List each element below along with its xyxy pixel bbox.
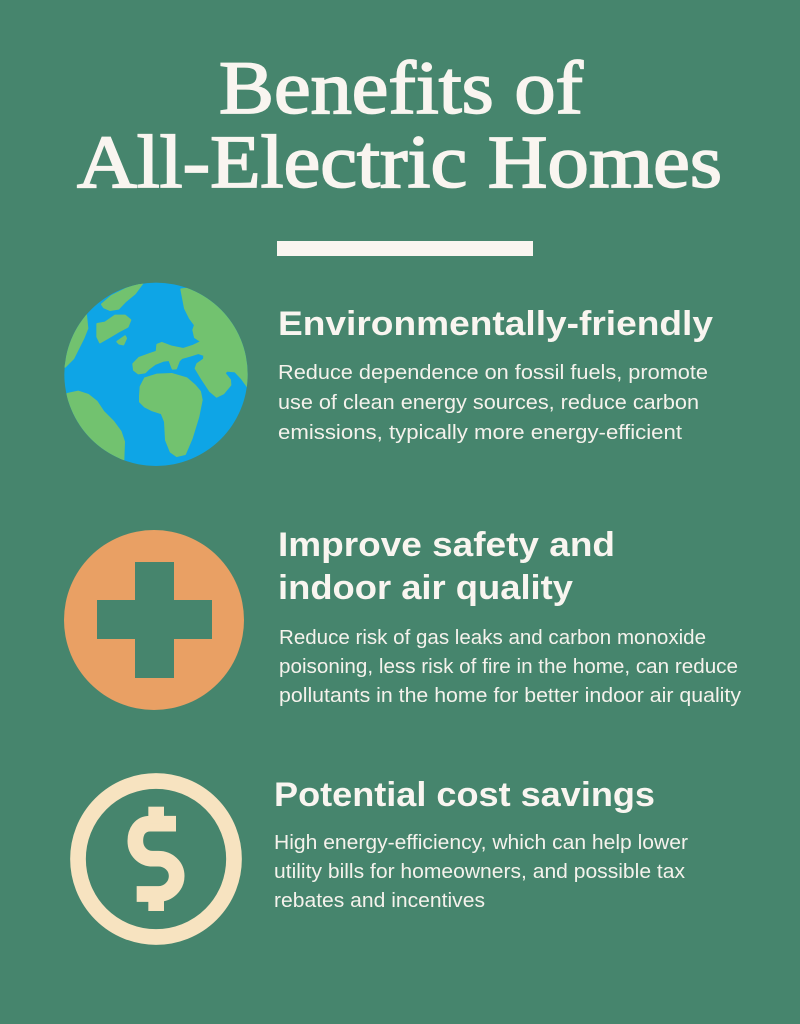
icon: dollar coin xyxy=(78,781,234,937)
text block: utility bills for homeowners, and possible tax xyxy=(274,861,685,883)
title: All-Electric Homes xyxy=(77,121,722,204)
title: Benefits of xyxy=(219,47,583,130)
heading: indoor air quality xyxy=(278,569,573,607)
title xyxy=(77,47,722,204)
text block: pollutants in the home for better indoor air quality xyxy=(279,685,741,707)
panel: cost savings xyxy=(78,776,688,937)
text block: Reduce risk of gas leaks and carbon monoxide xyxy=(279,627,706,649)
heading: Improve safety and xyxy=(278,526,615,564)
title divider bar xyxy=(277,241,533,256)
infographic canvas xyxy=(64,59,741,945)
icon: medical cross xyxy=(64,530,244,710)
text block xyxy=(274,832,688,912)
text block: emissions, typically more energy-efficient xyxy=(278,422,682,444)
text block: poisoning, less risk of fire in the home, can reduce xyxy=(279,656,738,678)
panel: safety and air quality xyxy=(64,526,741,710)
text block: Reduce dependence on fossil fuels, promote xyxy=(278,362,708,384)
heading: Potential cost savings xyxy=(274,776,655,814)
text block xyxy=(279,627,741,707)
text block: rebates and incentives xyxy=(274,890,485,912)
text block: use of clean energy sources, reduce carbon xyxy=(278,392,699,414)
text block xyxy=(278,362,708,444)
heading xyxy=(278,526,615,607)
heading: Environmentally-friendly xyxy=(278,305,713,343)
icon: earth globe xyxy=(57,282,257,466)
text block: High energy-efficiency, which can help lower xyxy=(274,832,688,854)
panel: environmentally-friendly xyxy=(57,282,713,466)
